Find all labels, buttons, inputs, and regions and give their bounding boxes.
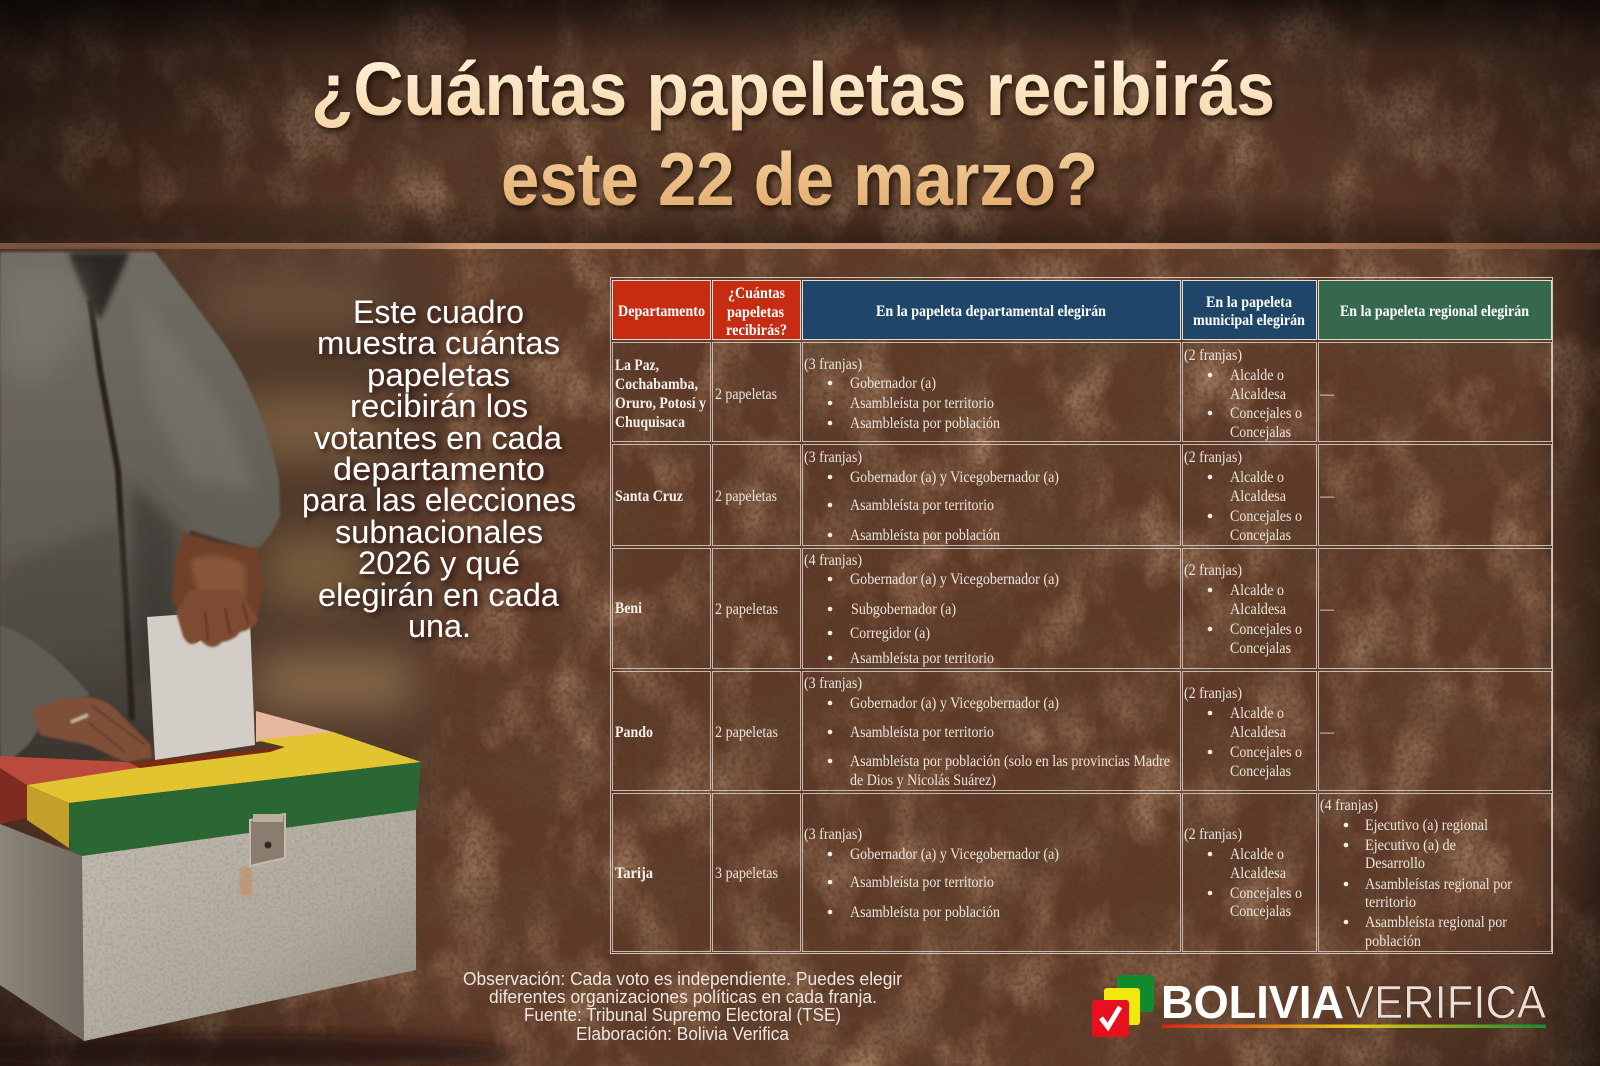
row: La Paz, Cochabamba, Oruro, Potosí y Chuquisaca: Gobernador (a) [850, 375, 936, 392]
row: Santa Cruz: Alcaldesa [1230, 488, 1286, 505]
intro paragraph: para las elecciones [302, 482, 576, 518]
row: Santa Cruz: Concejalas [1230, 527, 1291, 544]
footer note: observation and source: diferentes organizaciones políticas en cada franja. [489, 986, 877, 1007]
footer note: observation and source: Observación: Cada voto es independiente. Puedes elegir [463, 968, 902, 989]
footer note: observation and source: Elaboración: Bolivia Verifica [576, 1023, 790, 1044]
row: La Paz, Cochabamba, Oruro, Potosí y Chuquisaca: Concejales o [1230, 405, 1302, 422]
row: La Paz, Cochabamba, Oruro, Potosí y Chuquisaca: La Paz, [615, 357, 659, 374]
row: Pando: 2 papeletas [715, 724, 778, 741]
hand on ballot [172, 532, 263, 648]
row: La Paz, Cochabamba, Oruro, Potosí y Chuquisaca: Alcaldesa [1230, 386, 1286, 403]
row: La Paz, Cochabamba, Oruro, Potosí y Chuquisaca: Cochabamba, [615, 376, 698, 393]
floor shadow [0, 1036, 520, 1066]
row: La Paz, Cochabamba, Oruro, Potosí y Chuquisaca: Oruro, Potosí y [615, 395, 706, 412]
hoodie neck shadow [68, 252, 130, 320]
row: La Paz, Cochabamba, Oruro, Potosí y Chuquisaca: 2 papeletas [715, 386, 777, 403]
footer note: observation and source [463, 968, 902, 1044]
row: Pando: — [1319, 724, 1335, 741]
row: Tarija: (3 franjas) [804, 826, 862, 843]
row: Santa Cruz: Gobernador (a) y Vicegobernador (a) [850, 469, 1059, 486]
row: La Paz, Cochabamba, Oruro, Potosí y Chuquisaca: Asambleísta por población [850, 415, 1000, 432]
row: Pando: Asambleísta por territorio [850, 724, 994, 741]
row: Tarija: Asambleísta por población [850, 904, 1000, 921]
row: Pando: Asambleísta por población (solo en las provincias Madre [850, 753, 1170, 770]
table outer border [610, 278, 1552, 954]
row: Tarija: territorio [1365, 894, 1416, 911]
intro paragraph: muestra cuántas [317, 325, 560, 361]
row: Pando: (3 franjas) [804, 675, 862, 692]
intro paragraph: departamento [333, 451, 545, 487]
row: Tarija: (2 franjas) [1184, 826, 1242, 843]
hoodie [0, 252, 280, 770]
row: Pando: Concejalas [1230, 763, 1291, 780]
row: Beni: Gobernador (a) y Vicegobernador (a) [850, 571, 1059, 588]
intro paragraph: recibirán los [350, 388, 528, 424]
row: Santa Cruz: 2 papeletas [715, 488, 777, 505]
ballot paper [147, 614, 255, 760]
row: Pando: (2 franjas) [1184, 685, 1242, 702]
row: Tarija: Asambleístas regional por [1365, 876, 1513, 893]
row: Santa Cruz: Alcalde o [1230, 469, 1284, 486]
logo: Bolivia Verifica [1092, 975, 1546, 1037]
row: Tarija: Concejalas [1230, 903, 1291, 920]
row: Pando [615, 675, 1335, 789]
table header row: Departamento [618, 303, 705, 320]
row: Pando: Concejales o [1230, 744, 1302, 761]
row: Pando: Gobernador (a) y Vicegobernador (a) [850, 695, 1059, 712]
row: Tarija [615, 797, 1513, 950]
row: Tarija: Concejales o [1230, 885, 1302, 902]
near sleeve [0, 625, 90, 770]
intro paragraph: 2026 y qué [358, 545, 520, 581]
ballot slot [130, 747, 285, 768]
row: Santa Cruz: Asambleísta por territorio [850, 497, 994, 514]
intro paragraph: una. [408, 608, 471, 644]
intro paragraph: elegirán en cada [318, 577, 559, 613]
row: Beni: Corregidor (a) [850, 625, 930, 642]
table header row: En la papeleta [1206, 294, 1292, 311]
intro paragraph [302, 294, 576, 644]
row: La Paz, Cochabamba, Oruro, Potosí y Chuquisaca: Concejalas [1230, 424, 1291, 441]
row: La Paz, Cochabamba, Oruro, Potosí y Chuquisaca: Asambleísta por territorio [850, 395, 994, 412]
box faces [0, 824, 84, 1041]
intro paragraph: subnacionales [335, 514, 543, 550]
row: Santa Cruz: (2 franjas) [1184, 449, 1242, 466]
wordmark: VERIFICA [1345, 976, 1546, 1028]
title: este 22 de marzo? [501, 137, 1098, 221]
row: Beni: — [1319, 601, 1335, 618]
row: La Paz, Cochabamba, Oruro, Potosí y Chuquisaca [615, 347, 1335, 441]
row: Tarija: (4 franjas) [1320, 797, 1378, 814]
wordmark [1161, 976, 1546, 1028]
row: Pando: Pando [615, 724, 653, 741]
row: Beni [615, 552, 1335, 667]
row: Tarija: Alcaldesa [1230, 865, 1286, 882]
row: Pando: de Dios y Nicolás Suárez) [850, 772, 996, 789]
row: Tarija: Ejecutivo (a) regional [1365, 817, 1488, 834]
zipper [90, 300, 132, 720]
flag-colored underline [1162, 1024, 1546, 1028]
row: Beni: Subgobernador (a) [851, 601, 956, 618]
blurred background behind voter [0, 252, 430, 812]
latch [240, 814, 285, 896]
intro paragraph: papeletas [367, 357, 510, 393]
intro paragraph: votantes en cada [314, 420, 562, 456]
table grid lines [612, 342, 1552, 952]
row: Beni: (4 franjas) [804, 552, 862, 569]
wordmark: BOLIVIA [1161, 976, 1344, 1028]
row: La Paz, Cochabamba, Oruro, Potosí y Chuquisaca: (3 franjas) [804, 356, 862, 373]
row: Tarija: Asambleísta por territorio [850, 874, 994, 891]
row: Beni: (2 franjas) [1184, 562, 1242, 579]
title [311, 47, 1275, 221]
row: Tarija: población [1365, 933, 1421, 950]
lid top surface [0, 711, 421, 856]
row: Beni: Beni [615, 600, 642, 617]
table header row: papeletas [727, 304, 784, 321]
row: Pando: Alcaldesa [1230, 724, 1286, 741]
table header row: En la papeleta departamental elegirán [876, 303, 1106, 320]
row: Tarija: Gobernador (a) y Vicegobernador (a) [850, 846, 1059, 863]
icon: stacked checkmark cards [1092, 975, 1154, 1037]
table [610, 278, 1552, 954]
row: Beni: Alcalde o [1230, 582, 1284, 599]
table header row: En la papeleta regional elegirán [1340, 303, 1529, 320]
row: Tarija: Asambleísta regional por [1365, 914, 1508, 931]
row: Tarija: Alcalde o [1230, 846, 1284, 863]
row: Santa Cruz: Asambleísta por población [850, 527, 1000, 544]
row: La Paz, Cochabamba, Oruro, Potosí y Chuquisaca: Chuquisaca [615, 414, 685, 431]
row: Tarija: Tarija [615, 865, 653, 882]
title: ¿Cuántas papeletas recibirás [311, 47, 1275, 131]
row: La Paz, Cochabamba, Oruro, Potosí y Chuquisaca: Alcalde o [1230, 367, 1284, 384]
row: Beni: Concejalas [1230, 640, 1291, 657]
row: Santa Cruz: Santa Cruz [615, 488, 683, 505]
table header row: ¿Cuántas [728, 285, 785, 302]
row: La Paz, Cochabamba, Oruro, Potosí y Chuquisaca: — [1319, 386, 1335, 403]
divider line [0, 243, 1600, 249]
fingers on ballot [176, 590, 258, 647]
row: Beni: Asambleísta por territorio [850, 650, 994, 667]
row: Beni: Alcaldesa [1230, 601, 1286, 618]
row: Tarija: 3 papeletas [715, 865, 778, 882]
intro paragraph: Este cuadro [353, 294, 524, 330]
row: Beni: Concejales o [1230, 621, 1302, 638]
table header row [612, 280, 1552, 340]
row: Pando: Alcalde o [1230, 705, 1284, 722]
table header row: municipal elegirán [1193, 312, 1305, 329]
row: Santa Cruz: (3 franjas) [804, 449, 862, 466]
row: Santa Cruz [615, 449, 1335, 544]
row: La Paz, Cochabamba, Oruro, Potosí y Chuquisaca: (2 franjas) [1184, 347, 1242, 364]
row: Santa Cruz: Concejales o [1230, 508, 1302, 525]
row: Tarija: Ejecutivo (a) de [1365, 837, 1456, 854]
hoodie shading and folds [0, 520, 125, 700]
row: Santa Cruz: — [1319, 488, 1335, 505]
illustration: voter and ballot box [0, 252, 520, 1066]
footer note: observation and source: Fuente: Tribunal Supremo Electoral (TSE) [524, 1004, 841, 1025]
table header row: recibirás? [726, 322, 787, 339]
row: Tarija: Desarrollo [1365, 855, 1425, 872]
row: Beni: 2 papeletas [715, 601, 778, 618]
left hand with ring [32, 697, 152, 762]
